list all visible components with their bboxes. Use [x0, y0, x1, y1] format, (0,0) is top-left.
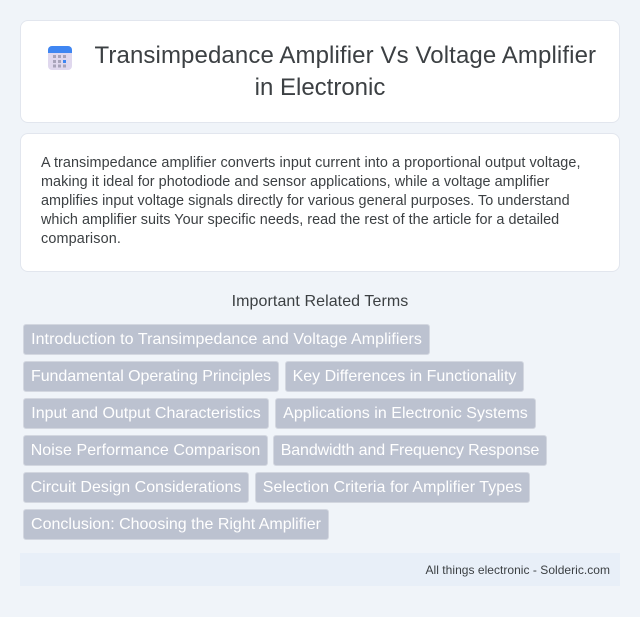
tag: Circuit Design Considerations [31, 479, 241, 496]
tag: Introduction to Transimpedance and Voltage Amplifiers [31, 331, 422, 348]
tag [255, 472, 530, 503]
tag: Fundamental Operating Principles [31, 368, 271, 385]
footer [20, 553, 620, 586]
tag [285, 361, 524, 392]
tag [275, 398, 536, 429]
tag [273, 435, 547, 466]
tag [23, 472, 249, 503]
tag [23, 509, 329, 540]
section heading: Important Related Terms [232, 293, 408, 310]
tag: Input and Output Characteristics [31, 405, 261, 422]
tag: Selection Criteria for Amplifier Types [263, 479, 522, 496]
intro paragraph: which amplifier suits Your specific needs, read the rest of the article for a detailed [41, 212, 559, 228]
intro paragraph: A transimpedance amplifier converts input current into a proportional output voltage, [41, 155, 581, 171]
intro text card [20, 133, 620, 272]
intro paragraph: comparison. [41, 231, 121, 247]
tag: Bandwidth and Frequency Response [281, 442, 539, 459]
intro paragraph: amplifies input voltage signals directly for various general purposes. To understand [41, 193, 570, 209]
tag [23, 398, 269, 429]
title [94, 42, 596, 101]
intro paragraph [41, 155, 581, 247]
title: in Electronic [255, 74, 385, 101]
tag [23, 361, 279, 392]
tag: Noise Performance Comparison [31, 442, 260, 459]
tag [23, 435, 268, 466]
tag: Applications in Electronic Systems [283, 405, 528, 422]
footer credit: All things electronic - Solderic.com [426, 563, 610, 577]
title: Transimpedance Amplifier Vs Voltage Amplifier [94, 42, 596, 69]
term tags [23, 324, 547, 540]
tag [23, 324, 430, 355]
intro paragraph: making it ideal for photodiode and sensor applications, while a voltage amplifier [41, 174, 549, 190]
tag: Key Differences in Functionality [293, 368, 516, 385]
tag: Conclusion: Choosing the Right Amplifier [31, 516, 321, 533]
header card [20, 20, 620, 123]
icon: calendar [48, 46, 72, 70]
